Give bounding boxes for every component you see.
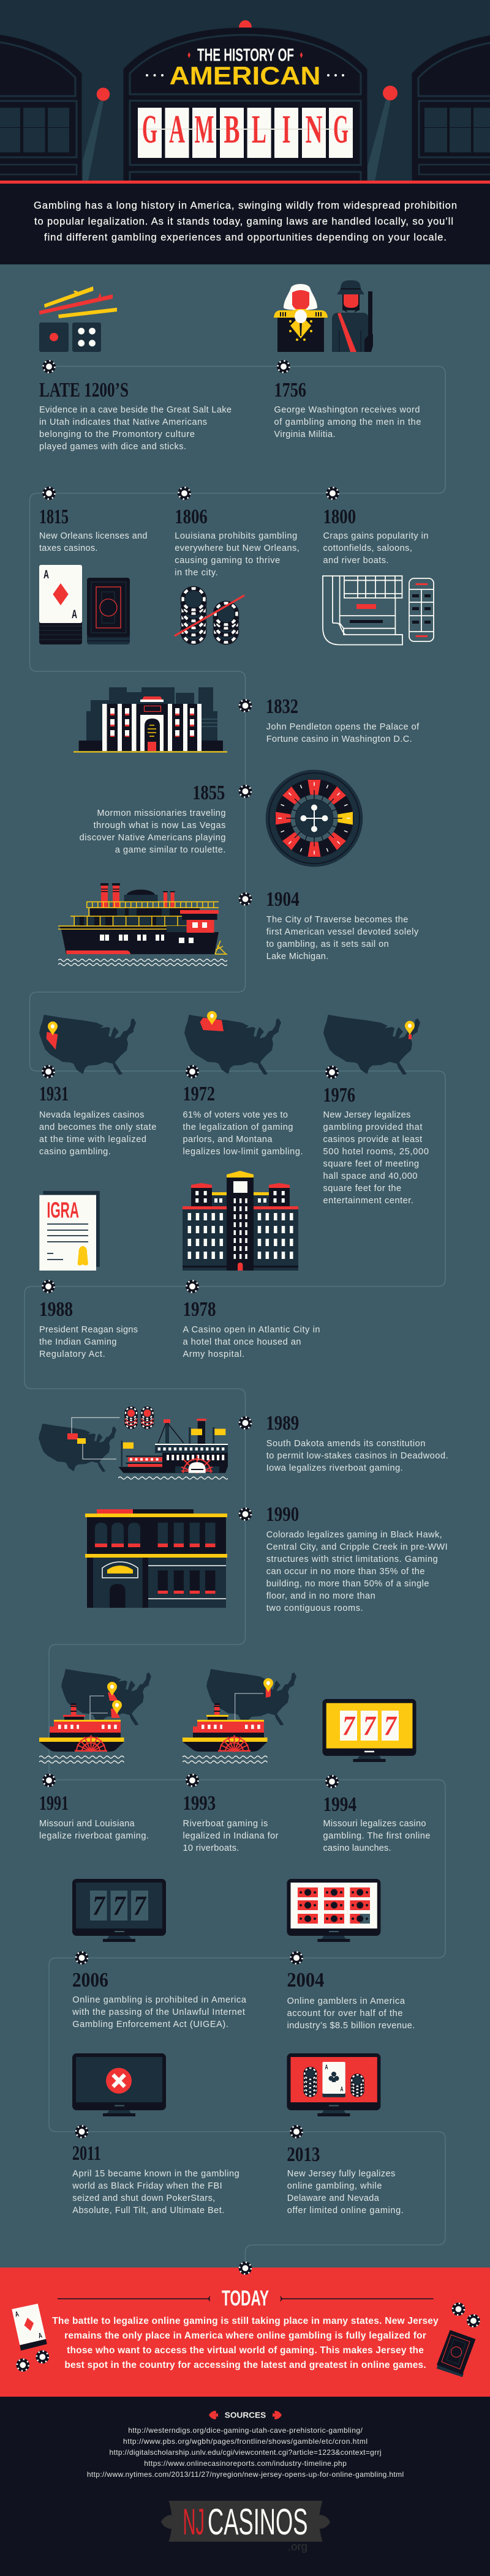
description <box>39 1325 138 1359</box>
description: a game similar to roulette. <box>115 845 225 855</box>
icon: map and riverboat <box>39 1406 228 1480</box>
description: can occur in no more than 35% of the <box>266 1567 424 1577</box>
entry: 1832 <box>74 687 420 753</box>
entry: 1972 <box>183 1011 303 1157</box>
entry: 1931 <box>39 1015 156 1157</box>
icon: playing cards: A <box>43 569 49 581</box>
description: taxes casinos. <box>39 543 97 553</box>
description: and river boats. <box>323 556 388 566</box>
gambling reels: G <box>333 107 349 152</box>
description <box>323 1819 430 1853</box>
sources list <box>87 2426 404 2479</box>
today text: best spot in the country for accessing the latest and greatest in online games. <box>64 2360 426 2370</box>
title <box>146 45 344 90</box>
icon: map montana <box>184 1011 281 1075</box>
description: through what is now Las Vegas <box>94 821 225 831</box>
description: Army hospital. <box>183 1350 244 1359</box>
description: gambling. The first online <box>323 1831 430 1841</box>
chip <box>42 487 56 500</box>
icon: map and boat <box>183 1669 296 1764</box>
description: Fortune casino in Washington D.C. <box>266 734 412 744</box>
year: 1978 <box>183 1298 216 1321</box>
description: a hotel that once housed an <box>183 1337 301 1347</box>
icon: monitor with card and chips <box>287 2053 380 2116</box>
description: Regulatory Act. <box>39 1350 105 1359</box>
description: discover Native Americans playing <box>80 833 225 843</box>
entry: 1904 <box>58 883 419 966</box>
chip <box>186 1774 199 1787</box>
sources list: http://www.nytimes.com/2013/11/27/nyregion/new-jersey-opens-up-for-online-gambling.html <box>87 2470 404 2479</box>
intro text: find different gambling experiences and opportunities depending on your locale. <box>44 232 447 243</box>
chip <box>75 1951 88 1965</box>
icon: monitor 777: 7 <box>342 1710 356 1741</box>
gambling reels: I <box>282 107 290 152</box>
title ornaments <box>146 52 344 77</box>
description: first American vessel devoted solely <box>266 927 419 937</box>
entry: 2013 <box>287 2053 404 2216</box>
chip <box>239 2261 252 2275</box>
icon: colorado building <box>85 1509 227 1608</box>
description: in the city. <box>175 568 218 578</box>
sources list: http://digitalscholarship.unlv.edu/cgi/viewcontent.cgi?article=1223&context=grrj <box>109 2448 381 2457</box>
entry: 1815 <box>39 487 147 644</box>
description: at the time with legalized <box>39 1135 146 1144</box>
title line: american: AMERICAN <box>169 61 321 90</box>
description <box>266 1439 448 1473</box>
icon: monitor with error <box>72 2053 166 2116</box>
gambling reels <box>138 107 353 158</box>
icon: map new jersey <box>323 1015 420 1075</box>
entry: 1991 <box>39 1669 151 1841</box>
year: 2004 <box>287 1969 324 1992</box>
entry: 1990 <box>85 1503 448 1613</box>
icon: left card and chips: A <box>37 2331 43 2340</box>
description: President Reagan signs <box>39 1325 138 1335</box>
description <box>323 531 429 566</box>
description: New Jersey legalizes <box>323 1110 410 1120</box>
year: 1832 <box>266 695 298 718</box>
description: Iowa legalizes riverboat gaming. <box>266 1463 403 1473</box>
entry: late 1200's <box>39 286 232 452</box>
icon: monitor with card and chips: A <box>341 2086 344 2093</box>
description: building, no more than 50% of a single <box>266 1579 429 1589</box>
year: 1989 <box>266 1412 299 1435</box>
description: Virginia Militia. <box>274 430 336 439</box>
chip <box>290 2125 303 2138</box>
description: Online gambling is prohibited in America <box>72 1995 247 2005</box>
entry: 1994 <box>322 1699 430 1853</box>
description: seized and shut down PokerStars, <box>72 2193 215 2203</box>
icon: roulette wheel <box>266 770 363 867</box>
chip <box>42 1065 55 1078</box>
description: New Jersey fully legalizes <box>287 2169 395 2179</box>
icon: igra document <box>39 1191 100 1271</box>
year: 2013 <box>287 2143 320 2166</box>
icon: monitor dark 777: 7 <box>134 1890 147 1921</box>
sources list: http://westerndigs.org/dice-gaming-utah-cave-prehistoric-gambling/ <box>128 2426 363 2435</box>
today text: The battle to legalize online gaming is still taking place in many states. New Jersey <box>52 2316 439 2326</box>
today text: those who want to access the virtual world of gaming. This makes Jersey the <box>67 2345 424 2356</box>
description <box>266 1530 448 1613</box>
icon: left card and chips <box>12 2304 49 2372</box>
description: square feet for the <box>323 1184 401 1193</box>
icon: monitor 777 <box>322 1699 417 1762</box>
description: gambling provided that <box>323 1122 423 1132</box>
description: played games with dice and sticks. <box>39 442 186 452</box>
description: cottonfields, saloons, <box>323 543 412 553</box>
description <box>183 1819 279 1853</box>
description: Louisiana prohibits gambling <box>175 531 297 541</box>
description: Missouri and Louisiana <box>39 1819 135 1829</box>
description: casino launches. <box>323 1843 391 1853</box>
description: Craps gains popularity in <box>323 531 429 541</box>
description: everywhere but New Orleans, <box>175 543 300 553</box>
chip <box>178 487 191 500</box>
description: George Washington receives word <box>274 405 420 415</box>
description: Evidence in a cave beside the Great Salt Lake <box>39 405 232 415</box>
description: floor, and in no more than <box>266 1591 375 1601</box>
icon: left card and chips: A <box>14 2310 20 2319</box>
description <box>274 405 421 439</box>
icon: steamboat <box>58 883 227 966</box>
description <box>39 405 232 452</box>
icon: monitor 777: 7 <box>384 1710 398 1741</box>
description: 10 riverboats. <box>183 1843 239 1853</box>
chip <box>325 1775 339 1788</box>
year: 1990 <box>266 1503 299 1526</box>
entry: 2004 <box>287 1879 415 2031</box>
year: 1806 <box>175 506 208 528</box>
intro text <box>34 200 457 243</box>
description: legalized in Indiana for <box>183 1831 279 1841</box>
description: Missouri legalizes casino <box>323 1819 426 1829</box>
chip <box>290 1951 303 1965</box>
description: The City of Traverse becomes the <box>266 915 408 925</box>
year: 1904 <box>266 888 300 911</box>
chip <box>277 360 290 373</box>
logo: nj casinos: .org <box>288 2541 307 2553</box>
description <box>72 1995 247 2029</box>
description: John Pendleton opens the Palace of <box>266 722 420 732</box>
year: 1931 <box>39 1083 69 1105</box>
description: entertainment center. <box>323 1196 413 1206</box>
panel: today <box>0 2261 490 2397</box>
description: Online gamblers in America <box>287 1996 405 2006</box>
year: 1976 <box>323 1084 355 1107</box>
description <box>287 1996 415 2031</box>
year: 1991 <box>39 1792 69 1815</box>
sources list: http://www.pbs.org/wgbh/pages/frontline/shows/gamble/etc/cron.html <box>123 2437 368 2446</box>
entry: 1978 <box>183 1171 320 1359</box>
icon: playing cards: A <box>72 608 77 621</box>
header: slot machines <box>0 0 490 190</box>
description: the legalization of gaming <box>183 1122 293 1132</box>
description: to permit low-stakes casinos in Deadwood. <box>266 1451 448 1461</box>
description <box>287 2169 404 2216</box>
icon: right card back and chips <box>437 2302 480 2377</box>
intro text: to popular legalization. As it stands today, gaming laws are handled locally, so you’ll <box>34 216 453 227</box>
description: New Orleans licenses and <box>39 531 147 541</box>
title line: the history of: THE HISTORY OF <box>197 45 294 65</box>
description: Mormon missionaries traveling <box>97 808 225 818</box>
entry: 2011 <box>72 2053 239 2216</box>
gambling reels: L <box>252 107 266 152</box>
year: 1815 <box>39 506 69 528</box>
entry: 1989 <box>39 1406 448 1480</box>
sources list: https://www.onlinecasinoreports.com/industry-timeline.php <box>144 2459 347 2468</box>
icon: washington and soldier <box>274 280 373 352</box>
heading: today: TODAY <box>222 2287 269 2310</box>
description: in Utah indicates that Native Americans <box>39 417 207 427</box>
description: legalize riverboat gaming. <box>39 1831 149 1841</box>
today text: remains the only place in America where online gambling is fully legalized for <box>64 2331 426 2341</box>
description <box>39 1110 156 1157</box>
icon: map and boat <box>39 1669 151 1764</box>
description: causing gaming to thrive <box>175 556 280 566</box>
gambling reels: G <box>142 107 157 152</box>
icon: map nevada <box>39 1015 136 1075</box>
logo: nj casinos: NJ <box>183 2501 205 2542</box>
year: 1972 <box>183 1083 215 1105</box>
description: belonging to the Promontory culture <box>39 430 195 439</box>
levers <box>83 86 398 181</box>
description: to gambling, as it sets sail on <box>266 939 389 949</box>
description: industry’s $8.5 billion revenue. <box>287 2021 415 2031</box>
chip <box>325 1066 339 1079</box>
description: legalizes low-limit gambling. <box>183 1147 303 1157</box>
center slot machine <box>124 28 368 190</box>
description <box>80 808 225 855</box>
description: Absolute, Full Tilt, and Ultimate Bet. <box>72 2206 224 2216</box>
gambling reels: N <box>305 107 322 152</box>
description: Nevada legalizes casinos <box>39 1110 144 1120</box>
icon: monitor 777: 7 <box>363 1710 377 1741</box>
heading: today <box>58 2287 434 2310</box>
timeline path <box>24 366 445 2268</box>
intro text: Gambling has a long history in America, swinging wildly from widespread prohibition <box>34 200 457 211</box>
icon: monitor with bills <box>287 1879 380 1942</box>
description: with the passing of the Unlawful Internet <box>72 2007 245 2017</box>
chip <box>42 1774 56 1787</box>
top light <box>239 20 252 28</box>
description: parlors, and Montana <box>183 1135 273 1144</box>
description: casino gambling. <box>39 1147 111 1157</box>
sources heading: SOURCES <box>225 2411 266 2420</box>
entry: 1976 <box>323 1015 429 1206</box>
entry: 1800 <box>323 487 434 645</box>
year: 1994 <box>323 1793 356 1816</box>
description <box>72 2169 239 2216</box>
description: hall space and 40,000 <box>323 1171 418 1181</box>
description: casinos provide at least <box>323 1135 422 1144</box>
description <box>175 531 300 578</box>
icon: monitor dark 777: 7 <box>92 1890 106 1921</box>
description: Riverboat gaming is <box>183 1819 268 1829</box>
icon: monitor dark 777: 7 <box>113 1890 126 1921</box>
description: A Casino open in Atlantic City in <box>183 1325 320 1335</box>
year: 2006 <box>72 1969 108 1992</box>
chip <box>42 1280 55 1293</box>
icon: monitor dark 777 <box>72 1879 166 1942</box>
description: Central City, and Cripple Creek in pre-WWI <box>266 1542 448 1552</box>
left slot machine <box>0 32 82 181</box>
chip <box>239 785 252 798</box>
description: offer limited online gaming. <box>287 2206 404 2216</box>
entry: 1756 <box>274 280 421 439</box>
entry: 1855 <box>80 770 363 867</box>
chip <box>42 360 56 373</box>
year: 1855 <box>192 782 225 804</box>
year: 1756 <box>274 379 306 401</box>
year: 1800 <box>323 506 356 528</box>
description: structures with strict limitations. Gaming <box>266 1555 438 1564</box>
description: South Dakota amends its constitution <box>266 1439 425 1449</box>
description: 500 hotel rooms, 25,000 <box>323 1147 429 1157</box>
icon: igra document: IGRA <box>47 1197 79 1223</box>
description: and becomes the only state <box>39 1122 156 1132</box>
icon: atlantic city hotel <box>183 1171 298 1271</box>
chip <box>239 1416 252 1430</box>
year: 1988 <box>39 1298 73 1321</box>
description: Gambling Enforcement Act (UIGEA). <box>72 2020 228 2029</box>
description: April 15 became known in the gambling <box>72 2169 239 2179</box>
intro band <box>0 181 490 264</box>
chip <box>326 487 339 500</box>
description <box>266 915 419 961</box>
chip <box>239 1507 252 1521</box>
description <box>323 1110 429 1206</box>
icon: chip stacks crossed out <box>175 586 244 644</box>
description: 61% of voters vote yes to <box>183 1110 288 1120</box>
logo: nj casinos: CASINOS <box>208 2501 307 2542</box>
description <box>183 1325 320 1359</box>
gambling reels: A <box>169 107 185 152</box>
description: Colorado legalizes gaming in Black Hawk, <box>266 1530 442 1540</box>
icon: monitor with card and chips: A <box>325 2064 328 2071</box>
year: 1993 <box>183 1792 216 1815</box>
entry: 1993 <box>183 1669 296 1853</box>
description <box>266 722 420 744</box>
description <box>39 531 147 553</box>
chip <box>186 1280 199 1293</box>
year: LATE 1200’S <box>39 379 129 401</box>
description: world as Black Friday when the FBI <box>72 2181 222 2191</box>
description <box>39 1819 149 1841</box>
panel: footer <box>0 2397 490 2576</box>
right slot machine <box>412 32 490 181</box>
description <box>183 1110 303 1157</box>
icon: dice and sticks <box>39 286 117 352</box>
entry: 2006 <box>72 1879 247 2029</box>
gambling reels: M <box>195 107 214 152</box>
description: Lake Michigan. <box>266 952 328 961</box>
chip <box>239 699 252 712</box>
description: two contiguous rooms. <box>266 1603 363 1613</box>
entry: 1806 <box>175 487 300 644</box>
entry: 1988 <box>39 1191 138 1359</box>
icon: palace of fortune casino <box>74 687 227 753</box>
chip <box>75 2125 88 2138</box>
description: account for over half of the <box>287 2009 402 2018</box>
icon: playing cards <box>39 565 130 644</box>
description: Delaware and Nevada <box>287 2193 380 2203</box>
chip <box>186 1065 199 1078</box>
logo: nj casinos <box>161 2501 330 2553</box>
sources heading <box>209 2411 282 2420</box>
description: online gambling, while <box>287 2181 382 2191</box>
gambling reels: B <box>224 107 240 152</box>
today text <box>52 2316 439 2370</box>
description: square feet of meeting <box>323 1159 419 1169</box>
chip <box>239 892 252 906</box>
description: the Indian Gaming <box>39 1337 116 1347</box>
year: 2011 <box>72 2142 101 2165</box>
icon: craps table <box>323 576 434 645</box>
description: of gambling among the men in the <box>274 417 421 427</box>
